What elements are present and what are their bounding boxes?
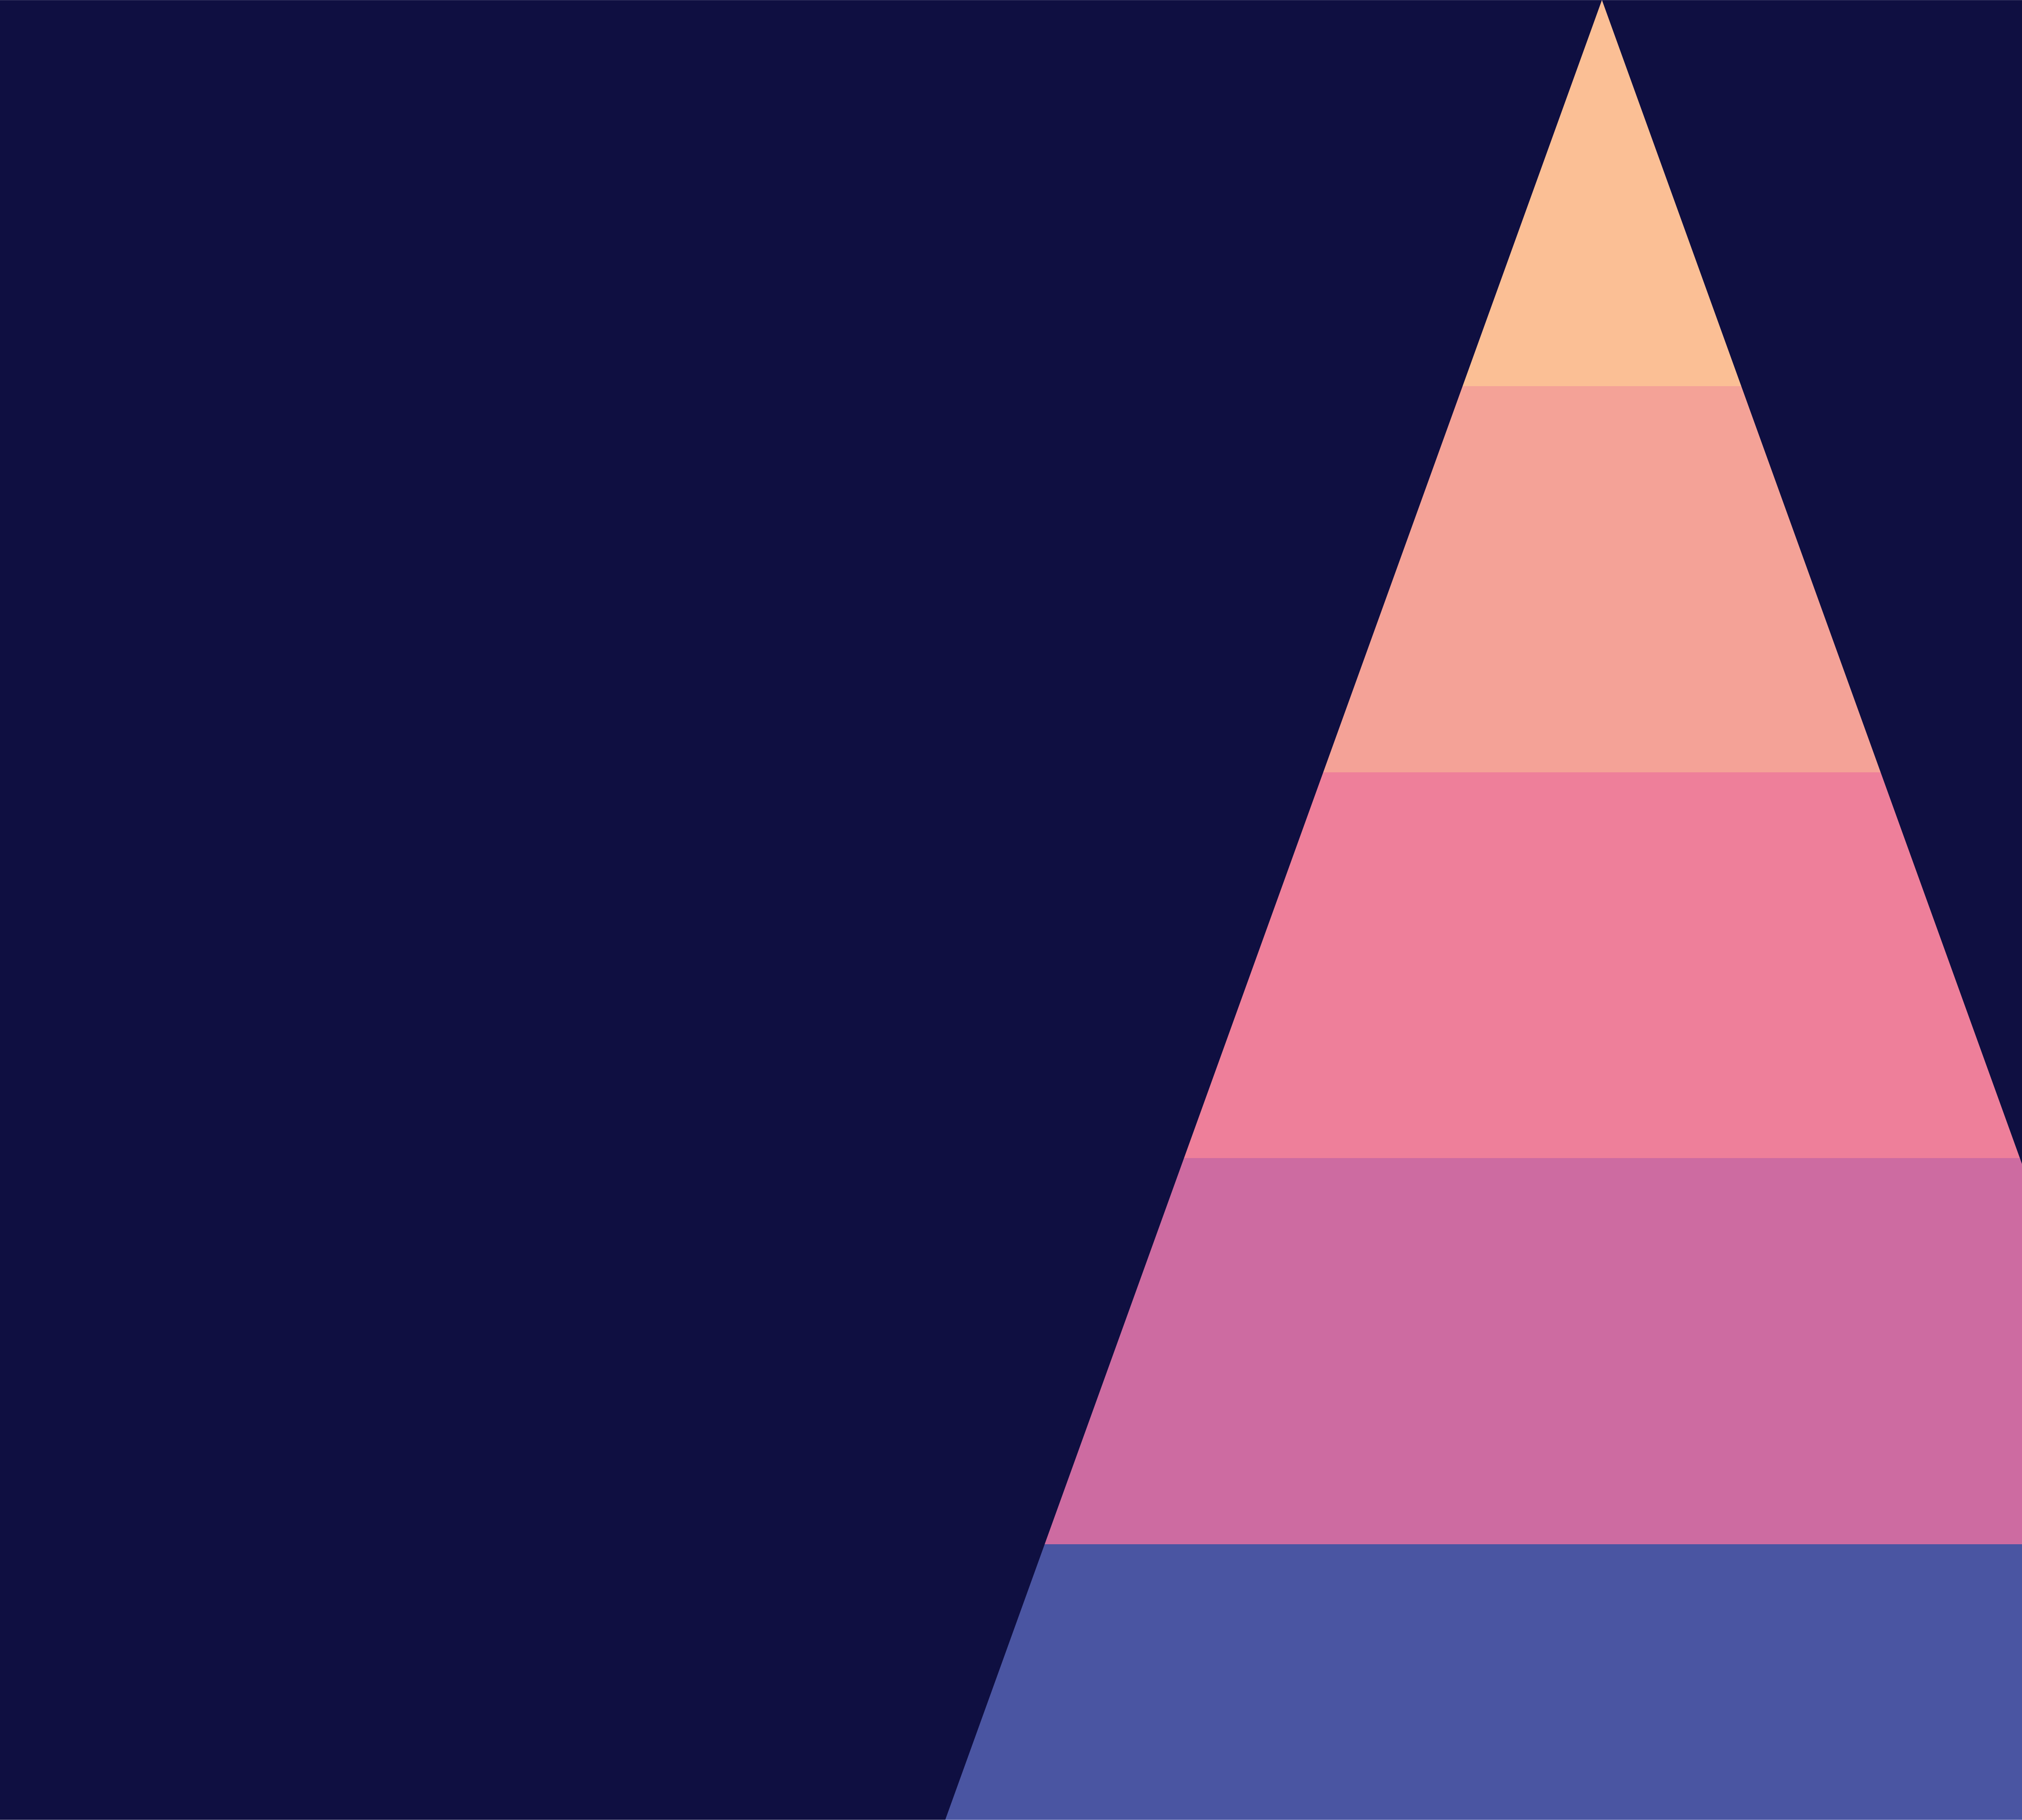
- pyramid: [945, 0, 2022, 1820]
- pyramid tier 3: pink: [1184, 772, 2020, 1158]
- pyramid tier 4: mauve: [1045, 1158, 2022, 1544]
- pyramid tier 1: peach apex: [1463, 0, 1741, 386]
- pyramid tier 5: indigo base: [945, 1544, 2022, 1820]
- pyramid tier 2: salmon: [1323, 386, 1880, 772]
